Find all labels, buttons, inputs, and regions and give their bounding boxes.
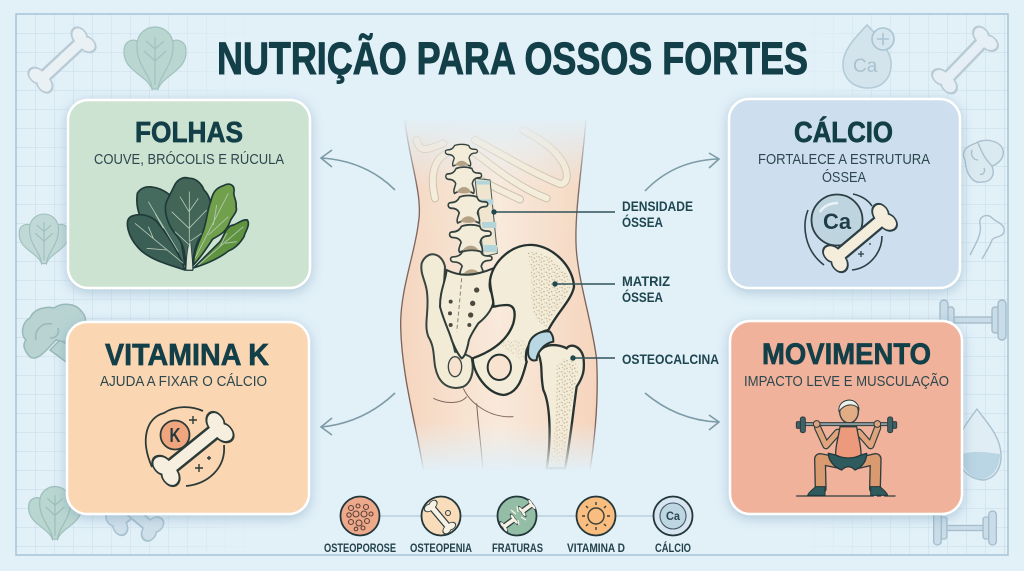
vertebral bodies with discs xyxy=(475,178,497,257)
icon: spinach top left xyxy=(124,27,186,89)
label: osteocalcina: OSTEOCALCINA xyxy=(622,351,719,367)
panel: folhas xyxy=(68,100,310,288)
title: NUTRIÇÃO PARA OSSOS FORTES xyxy=(217,33,808,84)
legend: osteoporose: OSTEOPOROSE xyxy=(324,543,396,555)
text: folhas description: COUVE, BRÓCOLIS E RÚCULA xyxy=(94,151,284,168)
femoral head cartilage xyxy=(528,331,553,360)
icon: calcium and bone: Ca xyxy=(823,209,852,234)
sacrum xyxy=(440,268,494,358)
icon: crossed bones bottom xyxy=(94,472,177,544)
barbell xyxy=(796,417,897,433)
icon: bone top left xyxy=(25,24,99,96)
icon: spinach bottom left xyxy=(29,486,81,539)
torso xyxy=(836,427,861,458)
legend: osteopenia: OSTEOPENIA xyxy=(410,543,472,555)
arrow: to movimento xyxy=(645,393,719,430)
icon: vitamin k and bone: K xyxy=(170,425,181,447)
icon: dumbbell right xyxy=(940,300,1006,340)
legend: fraturas xyxy=(492,496,543,555)
label: densidade óssea: ÓSSEA xyxy=(622,213,663,230)
body silhouette xyxy=(401,120,597,470)
icon: leafy greens xyxy=(127,178,248,270)
label: matriz óssea: MATRIZ xyxy=(622,273,670,289)
icon: calcium drop: Ca xyxy=(853,56,878,77)
legend: fraturas: FRATURAS xyxy=(492,543,543,555)
icon: water drop right xyxy=(957,409,1001,480)
icon: calcium and bone xyxy=(805,194,900,275)
legend: osteoporose xyxy=(324,496,396,555)
arrow: to vitamina k xyxy=(321,393,395,435)
arrow: to calcio xyxy=(645,153,719,191)
text: calcio description: FORTALECE A ESTRUTURA xyxy=(758,151,930,168)
icon: calcium drop xyxy=(843,25,894,88)
heading: calcio: CÁLCIO xyxy=(794,115,893,149)
shoes xyxy=(808,487,888,495)
legend: osteopenia xyxy=(410,496,472,555)
legend: vitamina d: VITAMINA D xyxy=(567,543,625,555)
heading: vitamina k: VITAMINA K xyxy=(105,337,270,372)
text: movimento description: IMPACTO LEVE E MUSCULAÇÃO xyxy=(744,373,949,390)
right hip bone xyxy=(473,245,574,395)
icon: vitamin k and bone xyxy=(146,407,237,489)
label: osteocalcina xyxy=(570,351,719,367)
panel: movimento xyxy=(730,321,962,514)
legend: vitamina d xyxy=(567,496,625,555)
heading: movimento: MOVIMENTO xyxy=(762,338,931,371)
icon: broccoli left xyxy=(23,304,86,362)
icon: dumbbell bottom right xyxy=(934,511,996,545)
panel: vitamina k xyxy=(67,322,309,514)
label: densidade óssea: DENSIDADE xyxy=(622,198,693,214)
ribs xyxy=(417,130,567,199)
arrow: to folhas xyxy=(321,150,395,190)
text: vitamina k description: AJUDA A FIXAR O CÁLCIO xyxy=(100,373,267,390)
panel: calcio: ÓSSEA xyxy=(822,169,866,186)
label: matriz óssea: ÓSSEA xyxy=(622,288,663,305)
icon: bone top right xyxy=(929,24,1001,96)
heading: folhas: FOLHAS xyxy=(135,117,243,149)
legs xyxy=(820,459,876,488)
legend: calcio xyxy=(654,496,692,555)
head xyxy=(840,400,858,423)
icon: bone outline right xyxy=(970,216,1004,259)
connector line xyxy=(380,515,655,517)
left ilium xyxy=(421,254,473,388)
femur xyxy=(538,345,584,468)
label: matriz óssea xyxy=(552,273,670,305)
panel: calcio xyxy=(729,99,960,288)
label: densidade óssea xyxy=(491,198,693,230)
shorts xyxy=(828,453,867,470)
icon: person squatting with barbell xyxy=(796,400,897,496)
anatomical illustration xyxy=(401,120,597,470)
lumbar vertebrae xyxy=(445,144,492,275)
legend: calcio: Ca xyxy=(666,511,681,523)
arms xyxy=(818,428,878,446)
legend: calcio: CÁLCIO xyxy=(655,542,691,555)
icon: vegetable outline right xyxy=(963,140,1003,182)
icon: spinach left xyxy=(19,214,69,264)
